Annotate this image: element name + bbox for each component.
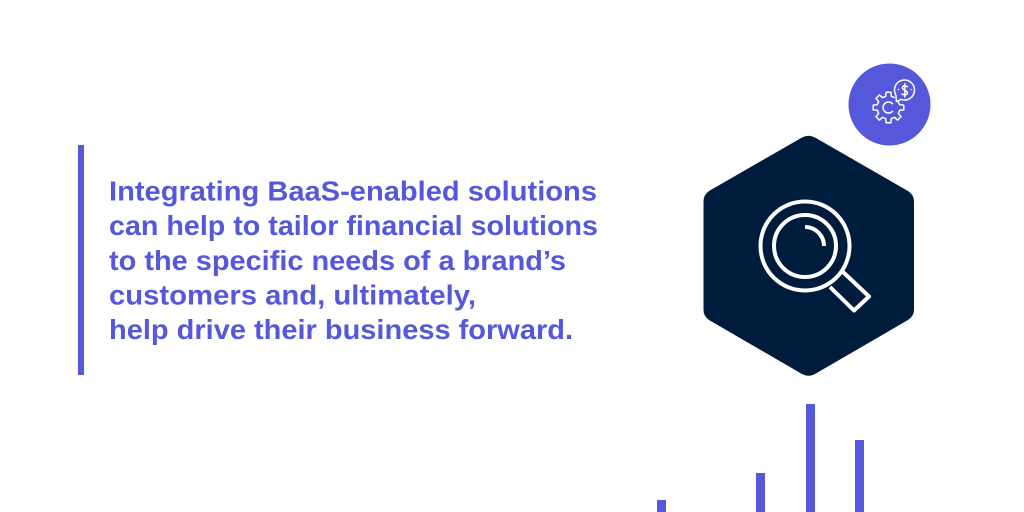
icon: magnifying glass [760, 202, 869, 310]
hexagon with magnifying glass icon [704, 136, 914, 376]
circle badge with gear and dollar icon [848, 64, 930, 146]
hexagon [704, 136, 914, 376]
accent bar beside quote [78, 145, 84, 375]
bar chart [657, 404, 864, 512]
quote text [109, 176, 598, 345]
quote text: Integrating BaaS-enabled solutions [109, 176, 597, 206]
quote text: customers and, ultimately, [109, 280, 476, 310]
badge circle [848, 64, 930, 146]
quote text: to the specific needs of a brand’s [109, 245, 566, 276]
quote text: can help to tailor financial solutions [109, 210, 598, 241]
icon: gear and dollar bubble [873, 80, 914, 123]
quote text: help drive their business forward. [109, 314, 573, 345]
